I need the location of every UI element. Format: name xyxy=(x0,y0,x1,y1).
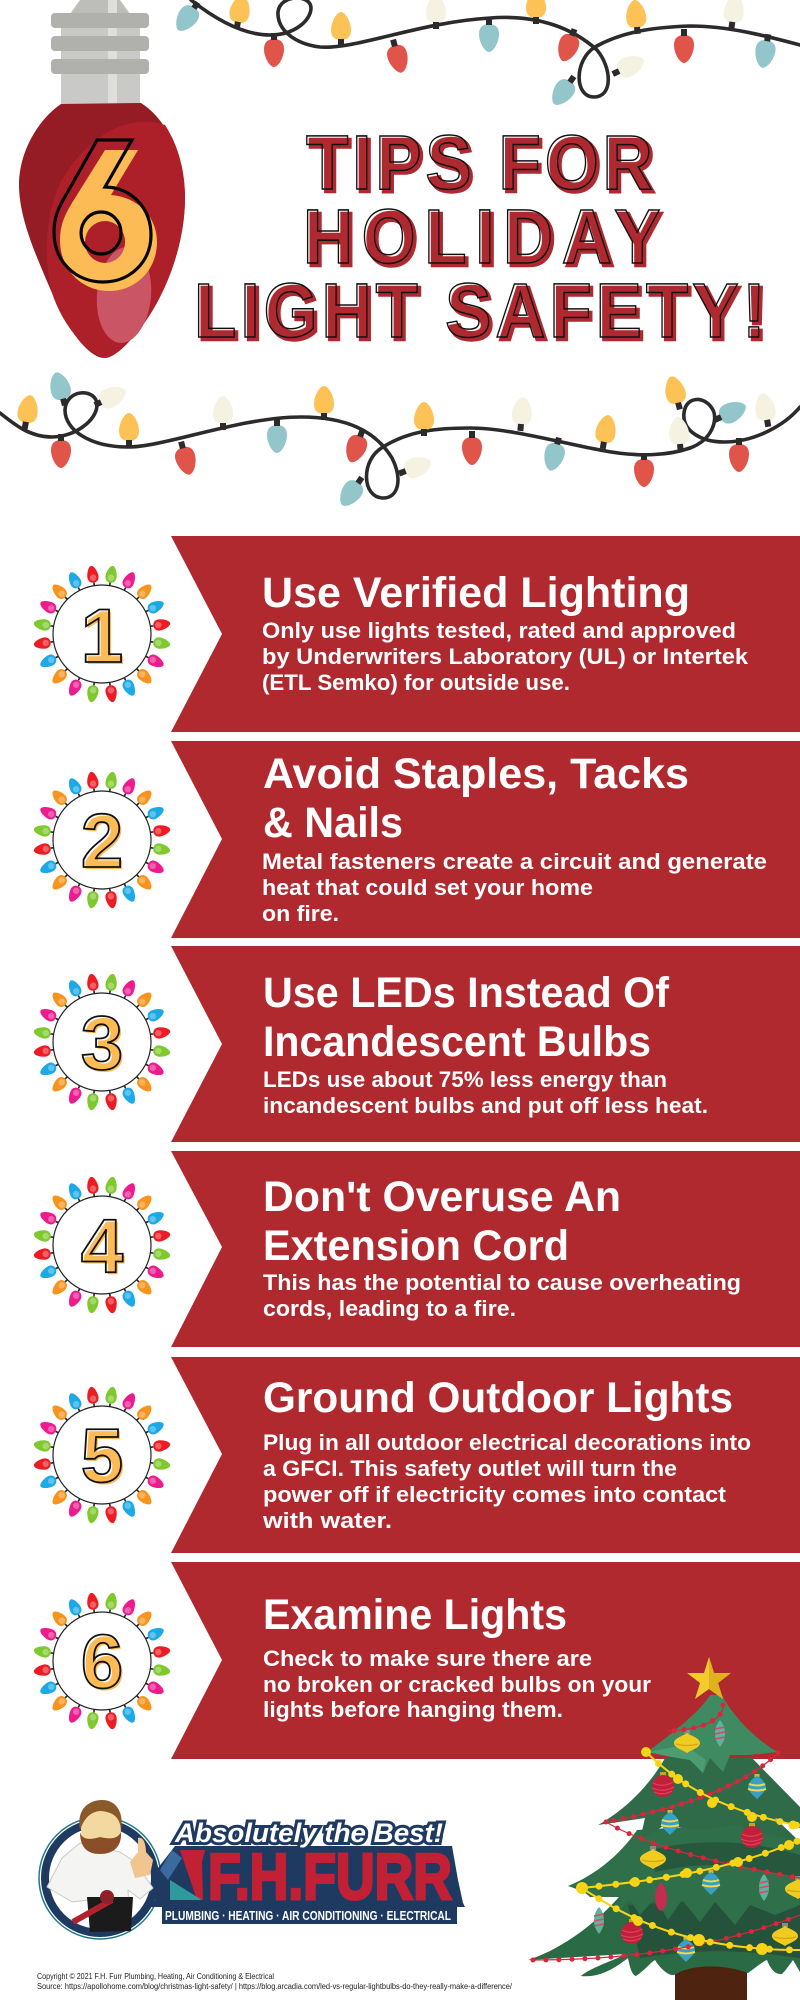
christmas tree xyxy=(528,1657,800,2000)
heading: avoid staples: Avoid Staples, Tacks xyxy=(263,750,689,798)
body text 2: heat that could set your home xyxy=(262,875,593,900)
logo banner background xyxy=(147,1846,465,1924)
heading: avoid staples xyxy=(263,750,689,847)
icon: bulb ring number 1: 1 xyxy=(83,596,125,681)
body text 6: Check to make sure there are xyxy=(263,1646,592,1671)
body text 2 xyxy=(262,849,767,926)
body text 6: lights before hanging them. xyxy=(263,1697,563,1722)
copyright and sources: Source: https://apollohome.com/blog/christmas-light-safety/ | https://blog.arcadia.com/led-vs-regular-lightbulbs-do-they-really-make-a-difference/ xyxy=(37,1982,513,1991)
ornaments xyxy=(594,1720,800,1962)
star xyxy=(687,1657,731,1699)
chevron banner 4 xyxy=(171,1151,800,1347)
body text 1 xyxy=(262,618,749,695)
body text 5: with water. xyxy=(262,1508,392,1533)
icon: bulb ring number 3: 3 xyxy=(83,1003,125,1088)
body text 5: a GFCI. This safety outlet will turn the xyxy=(263,1456,677,1481)
panel: tip 1 xyxy=(33,536,800,732)
heading: use verified lighting: Use Verified Lighting xyxy=(262,569,690,617)
icon: bulb ring number 2: 2 xyxy=(81,799,123,884)
body text 1: by Underwriters Laboratory (UL) or Intertek xyxy=(262,644,749,669)
heading: overuse extension cord: Don't Overuse An xyxy=(263,1173,621,1221)
title: LIGHT SAFETY! xyxy=(197,271,769,357)
copyright and sources xyxy=(37,1972,513,1991)
title: LIGHT SAFETY! xyxy=(194,268,766,354)
body text 3: LEDs use about 75% less energy than xyxy=(263,1067,667,1092)
icon: bulb ring number 4 xyxy=(33,1176,171,1314)
logo: F.H. Furr xyxy=(39,1800,465,1939)
icon: bulb ring number 3 xyxy=(33,973,171,1111)
icon: bulb ring number 6 xyxy=(33,1592,171,1730)
heading: examine lights: Examine Lights xyxy=(263,1591,567,1639)
logo wordmark: F.H.FURR xyxy=(208,1840,452,1913)
panel: tip 3 xyxy=(33,946,800,1142)
body text 5: Plug in all outdoor electrical decorations into xyxy=(263,1430,751,1455)
icon: bulb ring number 2: 2 xyxy=(83,801,125,886)
title: HOLIDAY xyxy=(303,194,660,280)
body text 4: cords, leading to a fire. xyxy=(263,1296,516,1321)
icon: bulb ring number 5: 5 xyxy=(81,1414,123,1499)
body text 6: no broken or cracked bulbs on your xyxy=(263,1672,651,1697)
title: TIPS FOR xyxy=(309,123,656,209)
body text 4: This has the potential to cause overheating xyxy=(263,1270,741,1295)
icon: bulb ring number 2 xyxy=(33,771,171,909)
logo tagline: absolutely the best: Absolutely the Best! xyxy=(174,1818,443,1848)
logo ring xyxy=(39,1817,161,1939)
heading: use leds: Use LEDs Instead Of xyxy=(263,969,670,1017)
logo mascot xyxy=(47,1800,153,1932)
icon: bulb ring number 1 xyxy=(33,565,171,703)
icon: bulb ring number 5 xyxy=(33,1386,171,1524)
icon: bulb ring number 3: 3 xyxy=(81,1001,123,1086)
body text 3: incandescent bulbs and put off less heat. xyxy=(263,1093,708,1118)
logo services line: PLUMBING · HEATING · AIR CONDITIONING · ELECTRICAL xyxy=(165,1908,451,1923)
icon: bulb ring number 1: 1 xyxy=(81,594,123,679)
body text 6 xyxy=(263,1646,651,1722)
panel: tip 6 xyxy=(33,1562,800,1759)
icon: bulb ring number 6: 6 xyxy=(83,1622,125,1707)
chevron banner 1 xyxy=(171,536,800,732)
panel: tip 2 xyxy=(33,741,800,938)
copyright and sources: Copyright © 2021 F.H. Furr Plumbing, Heating, Air Conditioning & Electrical xyxy=(37,1972,274,1981)
chevron banner 5 xyxy=(171,1357,800,1553)
title: HOLIDAY xyxy=(306,197,663,283)
title: TIPS FOR xyxy=(306,120,653,206)
yellow bead garlands xyxy=(582,1752,800,1950)
logo house icon xyxy=(160,1850,205,1900)
string of lights: bottom xyxy=(0,370,800,511)
heading: use leds xyxy=(263,969,670,1066)
heading: overuse extension cord: Extension Cord xyxy=(263,1222,569,1270)
string of lights: top xyxy=(170,0,800,110)
chevron banner 2 xyxy=(171,741,800,938)
body text 2: Metal fasteners create a circuit and generate xyxy=(262,849,767,874)
heading: overuse extension cord xyxy=(263,1173,621,1270)
heading: use leds: Incandescent Bulbs xyxy=(263,1018,651,1066)
title xyxy=(194,120,768,357)
body text 2: on fire. xyxy=(262,901,339,926)
body text 5: power off if electricity comes into contact xyxy=(263,1482,727,1507)
heading: ground outdoor lights: Ground Outdoor Lights xyxy=(263,1374,733,1422)
body text 4 xyxy=(263,1270,741,1321)
chevron banner 6 xyxy=(171,1562,800,1759)
body text 1: (ETL Semko) for outside use. xyxy=(262,670,570,695)
body text 3 xyxy=(263,1067,708,1118)
icon: bulb ring number 4: 4 xyxy=(81,1204,123,1289)
red bead garlands xyxy=(533,1705,800,1960)
panel: tip 4 xyxy=(33,1151,800,1347)
icon: big red bulb with number 6 xyxy=(19,0,185,358)
body text 1: Only use lights tested, rated and approved xyxy=(262,618,736,643)
icon: bulb ring number 4: 4 xyxy=(83,1206,125,1291)
icon: bulb ring number 5: 5 xyxy=(83,1416,125,1501)
panel: tip 5 xyxy=(33,1357,800,1553)
heading: avoid staples: & Nails xyxy=(263,799,403,847)
body text 5 xyxy=(262,1430,751,1533)
icon: bulb ring number 6: 6 xyxy=(81,1620,123,1705)
chevron banner 3 xyxy=(171,946,800,1142)
